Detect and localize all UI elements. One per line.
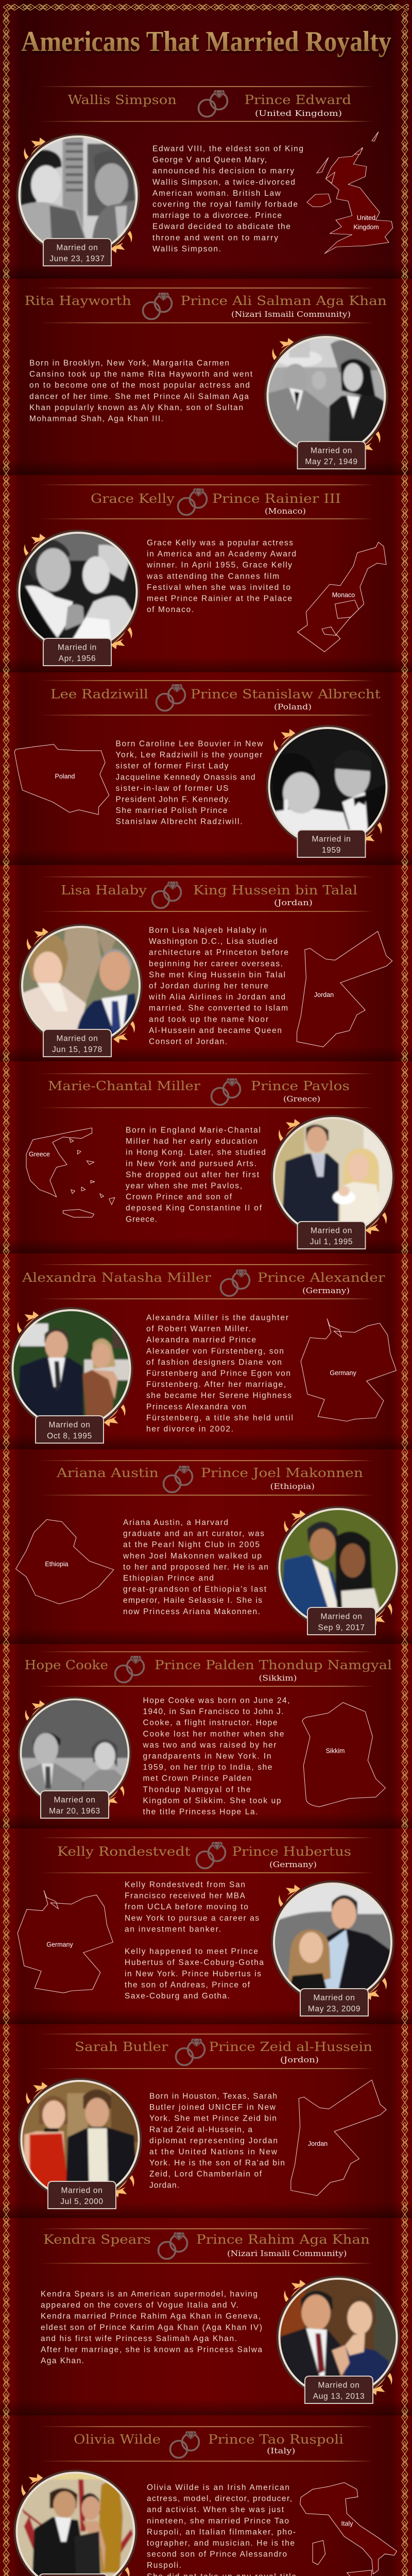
heading: Prince Tao Ruspoli [208,2432,344,2447]
date callout [307,1607,375,1635]
heading: Prince Palden Thondup Namgyal [154,1658,392,1672]
text block: President John F. Kennedy. [115,795,231,804]
text block: Alexander von Fürstenberg, son [146,1347,284,1355]
text block [41,2290,262,2365]
text block [146,539,296,614]
heading: (Monaco) [265,506,306,516]
text block: met Crown Prince Palden [143,1774,251,1783]
text block: architecture at Princeton before [149,948,288,957]
map: Sikkim: Sikkim [326,1748,345,1755]
panel: Olivia Wilde and Prince Tao Ruspoli [13,2426,397,2576]
date callout: Married on [48,1421,91,1429]
heading [39,1460,373,1496]
map: Jordan: Jordan [308,2140,328,2147]
heading [39,2228,373,2264]
text block: Born in Houston, Texas, Sarah [149,2092,277,2101]
date callout [48,2181,116,2209]
heading: Prince Ali Salman Aga Khan [180,294,387,308]
panel: Lee Radziwill and Prince Stanislaw Albrecht [14,680,390,857]
date callout [43,1029,111,1057]
text block: Washington D.C., Lisa studied [149,937,278,946]
date callout: Married on [311,446,352,455]
heading: Alexandra Natasha Miller [22,1270,212,1285]
text block: sister-in-law of former US [115,784,229,793]
text block: Kelly Rondestvedt from San [125,1880,245,1889]
text block: Al-Hussein and became Queen [149,1026,282,1035]
date callout [300,1989,368,2016]
map: Ethiopia [16,1519,114,1604]
text block: was attending the Cannes film [146,572,279,581]
photo: couple [16,133,140,257]
text block: throne and went on to marry [152,233,278,242]
text block [147,2483,296,2576]
text block: in New York and pursued Arts. [126,1159,256,1168]
text block: graduate and an art curator, was [123,1530,264,1538]
text block: great-grandson of Ethiopia's last [123,1585,267,1594]
heading: Lisa Halaby [61,883,147,897]
map: United Kingdom: United [357,214,375,222]
text block: New York to pursue a career as [125,1914,259,1923]
heading [39,876,373,912]
text block: Jacqueline Kennedy Onassis and [115,773,255,782]
map: Poland [14,744,109,815]
date callout [298,830,366,857]
heading: (Nizari Ismaili Community) [227,2249,347,2258]
heading: (Germany) [302,1286,350,1295]
text block: grandparents in New York. In [143,1752,271,1761]
heading: Prince Hubertus [232,1844,351,1859]
date callout: Married on [313,1994,355,2002]
text block: Born in England Marie-Chantal [126,1126,261,1134]
heading: (Italy) [267,2446,296,2455]
text block: year when she met Pavlos, [126,1182,242,1190]
date callout: Married on [318,2381,360,2389]
text block: Zeid, Lord Chamberlain of [149,2170,262,2179]
heading: Prince Alexander [258,1270,385,1285]
heading [39,484,373,519]
map: Sikkim [302,1702,385,1807]
text block: After her marriage, she is known as Princess Salwa [41,2345,262,2354]
panel: Wallis Simpson and Prince Edward [16,86,393,266]
text block: York. She met Prince Zeid bin [149,2114,277,2123]
text block: beginning her career overseas. [149,959,283,968]
map: United Kingdom [307,132,393,253]
heading [39,1073,373,1108]
heading [39,2426,373,2462]
date callout: Jul 1, 1995 [310,1238,353,1246]
text block: Ruspoli, an Italian filmmaker, pho- [147,2528,296,2536]
heading [39,1837,373,1873]
text block: meet Prince Rainier at the Palace [147,595,292,603]
text block: an investment banker. [125,1925,221,1934]
text block: Hubertus of Saxe-Coburg-Gotha [125,1958,264,1967]
text block [142,1696,289,1817]
text block: Kendra Spears is an American supermodel, having [41,2290,258,2299]
text block: Kelly happened to meet Prince [125,1947,258,1956]
heading: Grace Kelly [91,492,175,506]
date callout: Married on [61,2187,103,2195]
heading: (United Kingdom) [255,109,342,118]
heading: Prince Rainier III [212,492,341,506]
date callout: Jul 5, 2000 [60,2197,104,2206]
text block: American woman. British Law [152,189,281,198]
date callout: Aug 13, 2013 [313,2392,365,2401]
text block: York, Lee Radziwill is the younger [115,751,263,759]
date callout [41,1791,109,1818]
text block: Crown Prince and son of [126,1193,232,1201]
text block: from UCLA before moving to [125,1903,248,1911]
date callout: Sep 9, 2017 [318,1623,365,1632]
heading: Prince Pavlos [251,1079,350,1093]
text block: Princess Alexandra von [146,1402,246,1411]
photo: couple [19,2078,142,2201]
heading: Hope Cooke [25,1658,108,1672]
date callout: Oct 8, 1995 [47,1432,92,1440]
heading: Rita Hayworth [25,294,131,308]
text block: winner. In April 1955, Grace Kelly [146,561,292,570]
map: Jordan [291,2080,386,2196]
date callout: May 27, 1949 [305,457,358,466]
map: Jordan [297,931,392,1047]
map: Germany [18,1890,113,1993]
heading: Marie-Chantal Miller [48,1079,201,1093]
text block: Saxe-Coburg and Gotha. [125,1992,230,2001]
heading [22,1264,385,1299]
text block: Mohammad Shah, Aga Khan III. [29,414,163,423]
text block: of Jordan during her tenure [149,982,268,990]
text block [126,1126,266,1224]
text block: in America and an Academy Award [147,550,296,558]
text block: sister of former First Lady [115,762,229,771]
heading: Prince Rahim Aga Khan [196,2232,370,2247]
text block: Jordan. [149,2181,179,2190]
text block: nineteen, she married Prince Tao [147,2517,289,2526]
text block: emperor, Haile Selassie I. She is [123,1596,262,1605]
photo: couple [9,1307,133,1431]
text block: Fürstenberg and Prince Egon von [146,1369,290,1378]
heading: Olivia Wilde [74,2432,161,2447]
text block: now Princess Ariana Makonnen. [123,1607,260,1616]
heading: Sarah Butler [75,2040,168,2054]
text block: George V and Queen Mary, [152,156,267,164]
text block: She married Polish Prince [115,806,228,815]
text block: her divorce in 2002. [146,1425,233,1433]
text block: in Hong Kong. Later, she studied [126,1148,266,1157]
text block: and his first wife Princess Salimah Aga Khan. [41,2334,237,2343]
date callout [305,2376,373,2403]
text block: and activist. When she was just [147,2505,284,2514]
text block: Ariana Austin, a Harvard [123,1518,228,1527]
text block: Edward VIII, the eldest son of King [152,144,303,154]
text block [115,740,263,826]
text block: Born in Brooklyn, New York, Margarita Carmen [29,359,229,368]
text block: dancer of her time. She met Prince Ali Salman Aga [29,392,249,401]
heading: Kelly Rondestvedt [57,1844,191,1859]
date callout: Married on [56,243,98,252]
text block: Edward decided to abdicate the [152,223,290,231]
text block [29,359,253,423]
text block: she became Her Serene Highness [146,1392,291,1400]
text block: Thondup Namgyal of the [143,1785,250,1794]
text block: second son of Prince Alessandro [147,2550,287,2559]
photo: couple [18,1697,131,1810]
panel: Alexandra Natasha Miller and Prince Alexander [9,1264,396,1443]
text block: Aga Khan. [41,2357,84,2365]
text block: of fashion designers Diane von [146,1358,282,1367]
text block: when Joel Makonnen walked up [123,1552,262,1561]
text block [148,926,288,1046]
text block: Kendra married Prince Rahim Aga Khan in Geneva, [41,2312,261,2321]
heading: (Germany) [269,1860,317,1869]
text block [146,1314,293,1433]
photo: couple [16,530,140,653]
text block: Francisco received her MBA [125,1892,246,1901]
map: Germany: Germany [330,1369,356,1377]
photo: couple [13,2470,137,2576]
heading: Prince Edward [244,93,351,107]
text block: Alexandra Miller is the daughter [146,1314,288,1322]
text block: Hope Cooke was born on June 24, [143,1696,289,1705]
text block: of Monaco. [147,605,194,614]
heading: Prince Zeid al-Hussein [209,2040,372,2054]
text block: the son of Andreas, Prince of [125,1980,250,1989]
heading: Wallis Simpson [68,93,177,107]
text block: She dropped out after her first [126,1171,260,1179]
text block [149,2092,285,2190]
text block: Khan popularly known as Aly Khan, son of Sultan [29,403,243,412]
date callout: Married on [56,1035,98,1043]
heading [25,287,387,323]
date callout: Married on [320,1613,363,1621]
date callout [43,638,111,666]
text block: Ethiopian Prince and [123,1574,214,1583]
heading [39,86,373,122]
text block: Fürstenberg, a title she held until [146,1414,293,1422]
text block: eldest son of Prince Karim Aga Khan (Aga Khan IV) [41,2323,262,2332]
text block: Festival when she was invited to [147,583,290,592]
heading [39,680,381,716]
photo: couple [19,924,143,1047]
heading [25,1651,392,1687]
heading: (Poland) [274,702,312,711]
photo: couple [265,334,388,457]
text block: was two and was raised by her [142,1741,276,1750]
text block: Born Caroline Lee Bouvier in New [115,740,263,748]
text block [152,144,303,253]
date callout: Mar 20, 1963 [49,1807,100,1816]
photo: family [271,1115,394,1239]
text block [125,1880,264,2001]
text block: deposed King Constantine II of [126,1204,262,1213]
text block: at the United Nations in New [149,2147,278,2157]
text block: at the Pearl Night Club in 2005 [123,1540,260,1549]
heading: Kendra Spears [43,2232,151,2247]
text block: Ruspoli. [147,2561,181,2570]
map: Jordan: Jordan [314,991,334,998]
text block: in New York. Prince Hubertus is [125,1970,261,1978]
date callout: Married in [312,835,351,844]
text block: covering the royal family forbade [152,200,298,209]
heading: Lee Radziwill [50,687,148,702]
map: Ethiopia: Ethiopia [45,1561,68,1568]
heading: Prince Joel Makonnen [201,1466,363,1480]
heading: (Jordan) [274,898,313,907]
photo: couple [276,1506,400,1630]
date callout [43,239,111,266]
text block: Born Lisa Najeeb Halaby in [149,926,267,935]
heading: (Greece) [283,1094,320,1104]
text block: Cooke lost her mother when she [143,1730,284,1738]
text block: Fürstenberg. After her marriage, [146,1380,286,1389]
text block: Ra'ad Zeid al-Hussein, a [149,2125,252,2134]
date callout: Married on [311,1226,352,1235]
text block: appeared on the covers of Vogue Italia and V. [41,2301,238,2310]
date callout [39,2574,107,2576]
date callout: Jun 15, 1978 [52,1045,102,1054]
text block: to her and proposed her. He is an [123,1563,268,1571]
map: Germany: Germany [46,1941,73,1948]
date callout: May 23, 2009 [308,2005,360,2013]
panel: Hope Cooke and Prince Palden Thondup Namgyal [18,1651,392,1818]
date callout [298,1222,366,1249]
panel: Kendra Spears and Prince Rahim Aga Khan [39,2228,400,2403]
text block: the title Princess Hope La. [143,1807,258,1817]
map: Poland: Poland [55,773,75,780]
date callout [298,442,366,469]
heading: (Nizari Ismaili Community) [231,310,351,319]
photo: couple [266,725,389,849]
text block: Greece. [126,1215,157,1224]
text block [123,1518,268,1616]
text block: 1959, on her trip to India, she [143,1763,272,1772]
text block: announced his decision to marry [152,167,294,176]
panel: Kelly Rondestvedt and Prince Hubertus [18,1837,394,2016]
text block: Wallis Simpson, a twice-divorced [152,178,295,187]
heading [39,2033,373,2069]
text block: Stanislaw Albrecht Radziwill. [115,818,242,826]
text block: Olivia Wilde is an Irish American [147,2483,289,2492]
text block: Grace Kelly was a popular actress [147,539,293,547]
text block: married. She converted to Islam [149,1004,288,1013]
date callout [36,1416,104,1443]
heading: (Sikkim) [259,1673,297,1683]
photo: couple [276,2276,400,2399]
panel: Ariana Austin and Prince Joel Makonnen [16,1460,400,1635]
map: Greece [26,1128,115,1217]
panel: Lisa Halaby and King Hussein bin Talal [19,876,392,1057]
date callout: Apr, 1956 [59,654,96,663]
map: Monaco [298,542,386,652]
text block: on to become one of the most popular actress and [29,381,250,390]
panel: Sarah Butler and Prince Zeid al-Hussein [19,2033,386,2209]
heading: King Hussein bin Talal [193,883,357,897]
text block: Miller had her early education [126,1137,258,1146]
map: United Kingdom: Kingdom [353,224,379,231]
text block: of Robert Warren Miller. [146,1325,251,1333]
panel: Marie-Chantal Miller and Prince Pavlos [26,1073,394,1249]
photo: couple [271,1880,394,2004]
text block: marriage to a divorcee. Prince [152,211,282,220]
text block: Consort of Jordan. [149,1038,227,1046]
text block: Butler joined UNICEF in New [149,2103,276,2112]
text block: actress, model, director, producer, [147,2495,292,2503]
map: Italy [300,2483,397,2576]
text block: York. He is the son of Ra'ad bin [149,2159,285,2167]
text block: Cooke, a flight instructor. Hope [143,1719,277,1727]
text block: Wallis Simpson. [152,245,221,253]
map: Italy: Italy [341,2520,353,2528]
text block: Cansino took up the name Rita Hayworth and went [29,370,253,379]
date callout: Married in [58,643,97,652]
text block: with Alia Airlines in Jordan and [148,993,285,1002]
date callout: June 23, 1937 [49,255,105,263]
heading: (Jordon) [280,2055,319,2064]
text block: and took up the name Noor [149,1015,268,1024]
map: Germany [301,1319,396,1421]
text block: Alexandra married Prince [146,1336,256,1345]
date callout: 1959 [322,846,341,855]
text block: diplomat representing Jordan [149,2137,278,2145]
heading: Ariana Austin [56,1466,159,1480]
panel: Grace Kelly and Prince Rainier III [16,484,386,666]
panel: Rita Hayworth and Prince Ali Salman Aga Khan [25,287,388,469]
text block: She met King Hussein bin Talal [149,971,285,979]
text block: Kingdom of Sikkim. She took up [143,1797,281,1805]
text block: tographer, and musician. He is the [147,2539,295,2548]
heading: Prince Stanislaw Albrecht [191,687,381,702]
heading: (Ethiopia) [270,1482,315,1491]
map: Monaco: Monaco [332,591,355,599]
text block: 1940, in San Francisco to John J. [143,1707,283,1716]
date callout: Married on [54,1796,96,1804]
map: Greece: Greece [29,1151,50,1158]
